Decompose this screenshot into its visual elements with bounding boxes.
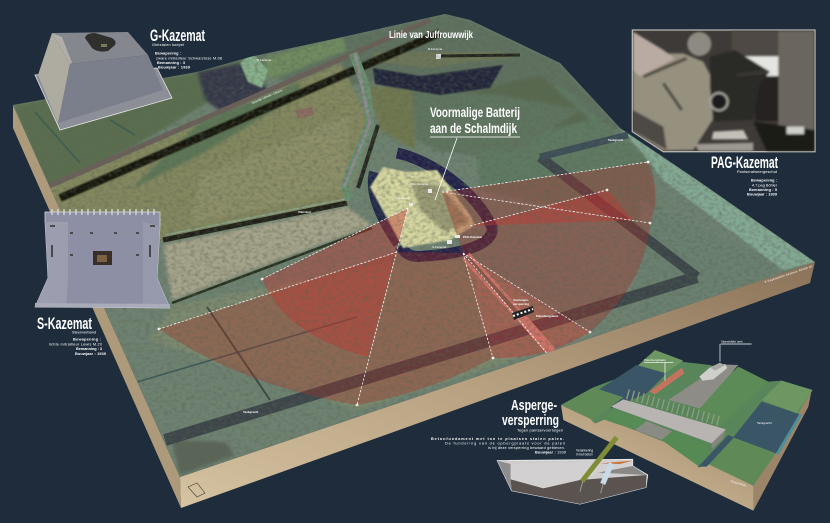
fort moat xyxy=(397,153,492,257)
block edge caption: 6 Kazematten beslaan 40400 m² xyxy=(764,264,813,284)
sector south west xyxy=(159,252,397,405)
S-Kazemat text: Steenverband xyxy=(72,330,96,334)
PAG photo xyxy=(632,30,815,152)
Asperge-versperring text: Betonfundament met ton te plaatsen stalen palen. xyxy=(431,437,564,441)
Asperge-versperring text: versperring xyxy=(502,412,559,429)
pond behind fort xyxy=(373,65,503,95)
map labels xyxy=(243,47,623,414)
Asperge-versperring text: Asperge- xyxy=(511,397,557,414)
anchoring detail label: Verankering xyxy=(576,448,593,452)
heading: Voormalige Batterij: aan de Schalmdijk xyxy=(430,121,517,136)
end dots xyxy=(158,161,651,406)
tank xyxy=(699,363,727,381)
map labels: S-Kazemat xyxy=(432,245,446,249)
cupola xyxy=(85,33,116,52)
G-Kazemat text: zware mitrailleur Schwarzlose M.08 xyxy=(156,56,222,60)
map labels: versperring xyxy=(513,302,529,306)
red fields of fire xyxy=(158,161,656,406)
map labels: PAG-Kazemat xyxy=(410,182,428,186)
sector south xyxy=(357,252,493,405)
dark ditch along the road xyxy=(358,125,378,188)
heading: Linie van Juffrouwwijk: Linie van Juffrouwwijk xyxy=(389,29,473,41)
foundation cross-section xyxy=(497,437,648,504)
anti-tank road xyxy=(466,256,552,352)
map labels: Palenbergplaats xyxy=(536,314,559,318)
PAG-Kazemat text: Bemanning : 5 xyxy=(749,188,777,192)
poles xyxy=(627,389,719,426)
farm building xyxy=(295,107,314,119)
S-Kazemat text xyxy=(37,314,106,356)
S-Kazemat text: S-Kazemat xyxy=(37,314,92,333)
detail labels: Vijandelijke tank xyxy=(721,340,743,344)
B-Kazemat icon north xyxy=(436,54,441,59)
G-Kazemat text: Bouwjaar : 1939 xyxy=(158,66,190,70)
G-Kazemat text: G-Kazemat xyxy=(150,26,205,45)
fort island xyxy=(370,167,475,248)
G-Kazemat text: Bemanning : 3 xyxy=(157,61,185,65)
scale marker xyxy=(188,483,205,497)
map labels: PAG-Kazemat xyxy=(463,235,482,239)
map labels: Spoorlijn Utrecht - Utrecht xyxy=(251,88,283,105)
anchoring detail label xyxy=(576,448,593,456)
map labels: Voertuigen- xyxy=(513,298,529,302)
S-Kazemat text: Bouwjaar : 1939 xyxy=(75,352,106,356)
PAG-Kazemat text: 4.7 pag Böhler xyxy=(752,184,778,188)
sector north east xyxy=(442,162,656,223)
detail labels: Tankgracht xyxy=(757,421,772,425)
terrain block base xyxy=(13,105,815,508)
vehicle barrier xyxy=(512,306,534,320)
PAG-Kazemat text xyxy=(711,154,778,196)
palen storage xyxy=(649,368,684,394)
detail labels: Palenbergplaats xyxy=(644,358,666,362)
G-Kazemat text: Bewapening : xyxy=(155,52,181,56)
PAG-Kazemat text: Pantserafweergeschut xyxy=(737,170,778,174)
Asperge-versperring text: De fundering van de opbergplaats voor de palen xyxy=(445,442,565,446)
heading: Voormalige Batterij: Voormalige Batterij xyxy=(430,105,520,120)
sector bright triangle xyxy=(470,190,633,226)
light edge strip xyxy=(620,128,815,270)
S-Kazemat text: Bemanning : 3 xyxy=(76,347,102,351)
Asperge-versperring text: is bij deze versperring bewaard gebleven. xyxy=(488,446,565,450)
detail leader lines xyxy=(644,344,752,381)
heading: Voormalige Batterij xyxy=(430,105,520,200)
sector G-Kazemat xyxy=(262,208,408,357)
map labels: Tankgracht xyxy=(608,138,623,142)
tank ditch xyxy=(165,277,697,440)
map labels: B-Kazemat xyxy=(428,47,442,51)
sector east xyxy=(442,192,650,332)
map labels: B-Kazemat xyxy=(257,58,271,62)
map labels: G-Kazemat xyxy=(395,196,410,200)
thin ditches xyxy=(137,317,357,382)
S-Kazemat text: lichte mitrailleur Lewis M.20 xyxy=(49,342,102,346)
map labels: Vliersloot xyxy=(298,210,311,214)
PAG-Kazemat text: Bewapening : xyxy=(751,178,777,182)
grain texture xyxy=(38,31,812,474)
detail diagram: asparagus barrier xyxy=(561,344,813,511)
hedge xyxy=(163,203,347,240)
mound B-Kazemat west xyxy=(240,53,268,88)
Asperge-versperring text: Tegen pantservoertuigen xyxy=(517,428,563,432)
loophole xyxy=(93,251,112,265)
detail labels xyxy=(644,340,772,488)
railway xyxy=(47,20,430,187)
G-Kazemat text xyxy=(150,26,222,70)
S-Kazemat block xyxy=(35,209,170,308)
anchoring detail label: in het beton xyxy=(576,452,593,456)
detail labels: 10 tot 60 km xyxy=(730,479,747,488)
railway dark band xyxy=(60,33,440,198)
PAG-Kazemat text: Bouwjaar : 1939 xyxy=(747,192,777,196)
Asperge-versperring text: Bouwjaar : 1939 xyxy=(535,450,566,454)
kazemat markers xyxy=(409,189,460,244)
firing lines xyxy=(159,162,650,405)
G-Kazemat text: Gietstalen koepel xyxy=(152,43,184,47)
G-Kazemat block xyxy=(35,32,172,130)
Asperge-versperring text xyxy=(431,397,566,454)
map labels: Tankgracht xyxy=(243,410,258,414)
PAG-Kazemat text: PAG-Kazemat xyxy=(711,154,778,172)
S-Kazemat text: Bewapening : xyxy=(73,338,101,342)
fence teeth xyxy=(52,209,154,215)
sector PAG xyxy=(463,253,590,358)
farm road xyxy=(345,53,370,200)
